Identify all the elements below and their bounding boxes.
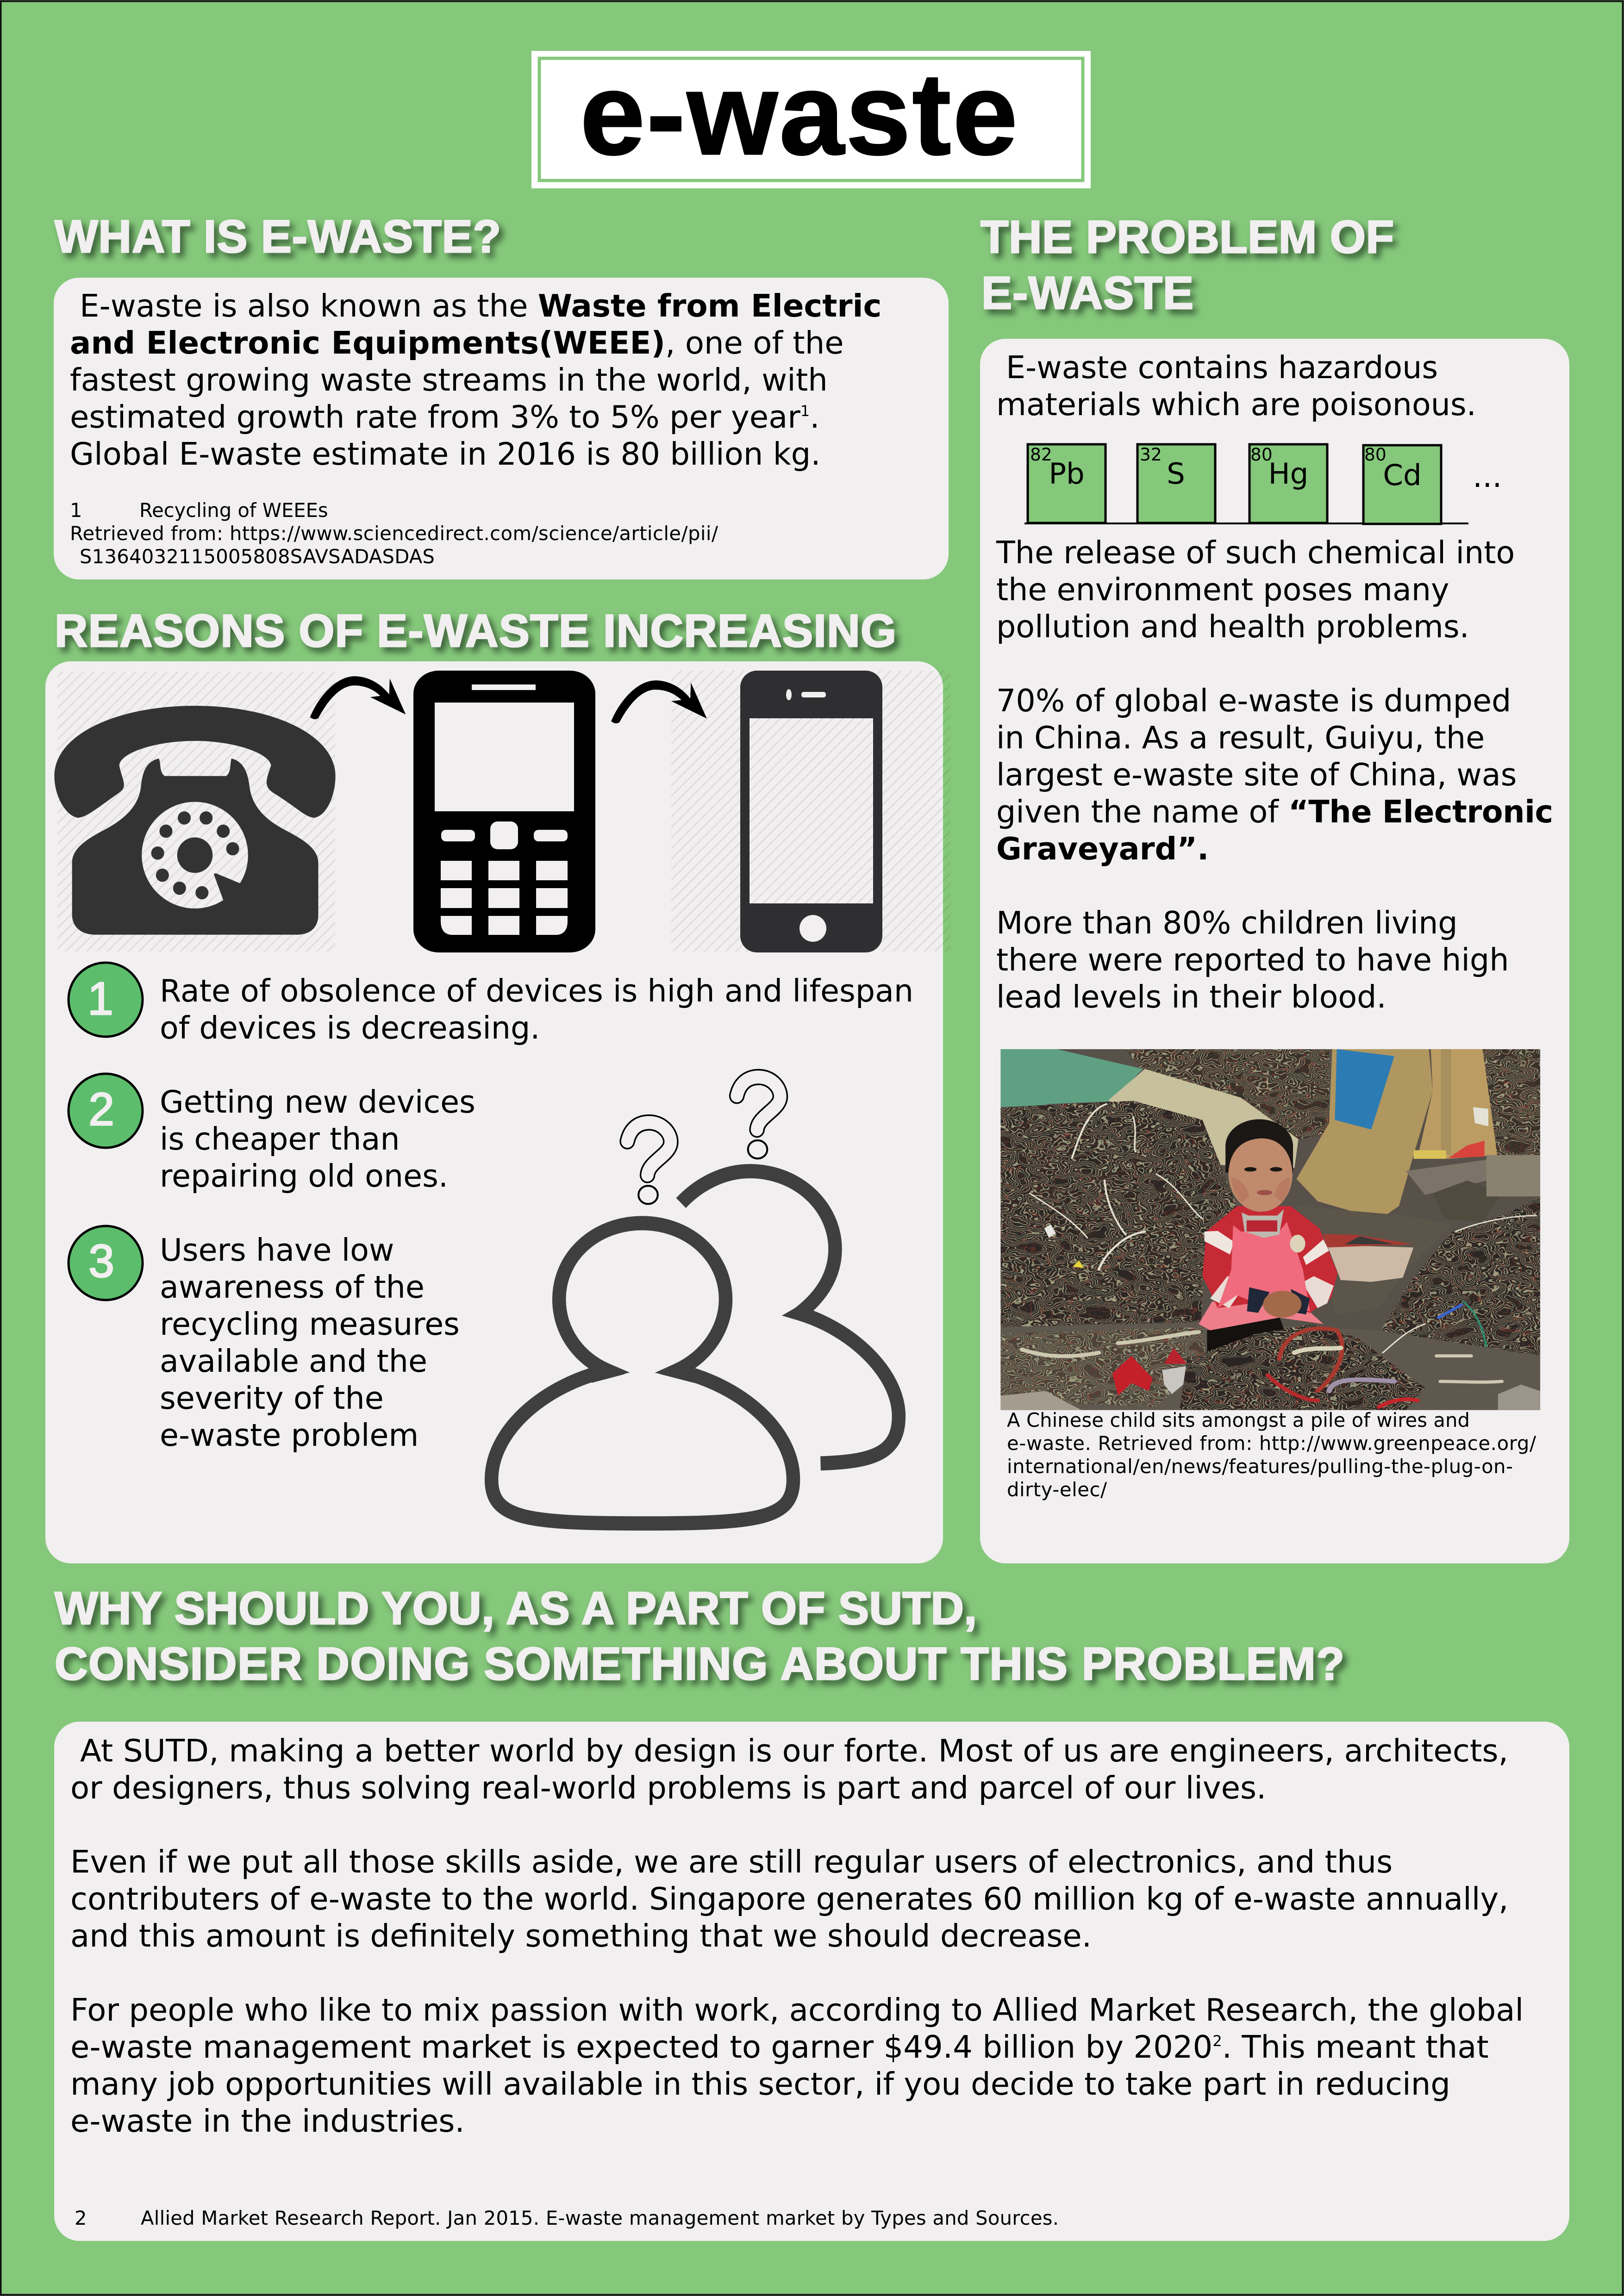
panel: why should you — [54, 1722, 1569, 2241]
pollution text: The release of such chemical into — [996, 535, 1515, 571]
periodic table elements — [1024, 444, 1502, 524]
definition text: Global E-waste estimate in 2016 is 80 billion kg. — [70, 436, 821, 472]
pollution text: 70% of global e-waste is dumped — [996, 683, 1511, 719]
definition text: estimated growth rate from 3% to 5% per year — [70, 399, 800, 435]
arrow: telephone to mobile — [310, 676, 406, 719]
definition text: E-waste is also known as the Waste from Electric — [80, 288, 881, 324]
reason 3 text: available and the — [160, 1343, 427, 1379]
element: Hg: 80 — [1250, 444, 1273, 465]
question mark front — [627, 1122, 671, 1204]
footnote 1: S1364032115005808SAVSADASDAS — [80, 545, 435, 568]
reason 3 text: Users have low — [160, 1232, 394, 1268]
number badge 2 — [69, 1074, 143, 1148]
body text: e-waste management market is expected to garner $49.4 billion by 2020 — [70, 2029, 1212, 2065]
pollution text: More than 80% children living — [996, 905, 1458, 941]
body text: or designers, thus solving real-world problems is part and parcel of our lives. — [70, 1770, 1266, 1806]
heading: why should you: CONSIDER DOING SOMETHING ABOUT THIS PROBLEM? — [55, 1638, 1344, 1689]
definition text: , one of the — [665, 325, 844, 361]
hatch background behind smartphone — [671, 671, 950, 952]
hazardous materials text: E-waste contains hazardous — [1006, 349, 1438, 386]
pollution text: in China. As a result, Guiyu, the — [996, 720, 1485, 756]
body text: e-waste in the industries. — [70, 2103, 465, 2139]
ellipsis: ... — [1473, 458, 1502, 494]
panel: reasons of e-waste increasing — [45, 661, 950, 1563]
question mark back — [737, 1077, 780, 1158]
heading: why should you: WHY SHOULD YOU, AS A PART OF SUTD, — [55, 1582, 977, 1634]
body text: and this amount is definitely something that we should decrease. — [70, 1918, 1092, 1954]
title text: e-waste — [580, 49, 1018, 179]
pollution text: the environment poses many — [996, 572, 1449, 608]
body text: many job opportunities will available in this sector, if you decide to take part in reducing — [70, 2066, 1450, 2102]
reason 2 — [69, 1074, 475, 1194]
reason 2 text: repairing old ones. — [160, 1158, 448, 1194]
photo caption: A Chinese child sits amongst a pile of wires and — [1007, 1409, 1470, 1431]
element: Pb — [1028, 444, 1106, 523]
photo caption: dirty-elec/ — [1007, 1478, 1107, 1501]
number badge 3: 3 — [88, 1235, 114, 1287]
footnote 1: Retrieved from: https://www.sciencedirect.com/science/article/pii/ — [70, 522, 718, 545]
icon: smartphone — [740, 671, 882, 952]
reason 3 text: severity of the — [160, 1380, 384, 1416]
photo caption: e-waste. Retrieved from: http://www.greenpeace.org/ — [1007, 1432, 1537, 1455]
element: S — [1137, 444, 1215, 523]
element: Pb: Pb — [1049, 457, 1085, 491]
definition text: and Electronic Equipments(WEEE) — [70, 325, 665, 361]
heading: the problem of e-waste: E-WASTE — [981, 267, 1193, 318]
panel: the problem of e-waste — [980, 339, 1569, 1563]
body text: At SUTD, making a better world by design is our forte. Most of us are engineers, architects, — [80, 1733, 1508, 1769]
footnote 1: 1 — [70, 499, 82, 522]
footnote 2: 2 — [75, 2207, 87, 2229]
definition text: . — [810, 399, 820, 435]
body text: 2 — [1212, 2032, 1222, 2050]
reason 1 text: Rate of obsolence of devices is high and lifespan — [160, 973, 913, 1009]
pollution text: lead levels in their blood. — [996, 979, 1387, 1015]
hazardous materials text: materials which are poisonous. — [996, 386, 1476, 423]
footnote 2: Allied Market Research Report. Jan 2015. E-waste management market by Types and Sources. — [141, 2207, 1059, 2229]
body text: Even if we put all those skills aside, we are still regular users of electronics, and thus — [70, 1844, 1393, 1880]
body text: . This meant that — [1222, 2029, 1489, 2065]
reason 1 — [69, 963, 913, 1046]
footnote 1: Recycling of WEEEs — [139, 499, 328, 522]
definition text: 1 — [800, 402, 810, 420]
reason 1 text: of devices is decreasing. — [160, 1010, 540, 1046]
pollution text: given the name of “The Electronic — [996, 794, 1553, 830]
pollution text: largest e-waste site of China, was — [996, 757, 1517, 793]
reason 3 text: e-waste problem — [160, 1417, 418, 1453]
photo caption: international/en/news/features/pulling-the-plug-on- — [1007, 1455, 1513, 1478]
number badge 3 — [69, 1226, 143, 1300]
element: Cd: Cd — [1383, 458, 1422, 492]
element: Pb: 82 — [1030, 444, 1052, 465]
reason 2 text: is cheaper than — [160, 1121, 400, 1157]
heading: the problem of e-waste: THE PROBLEM OF — [981, 211, 1394, 262]
icon: confused users — [492, 1077, 899, 1524]
heading: reasons of e-waste increasing: REASONS OF E-WASTE INCREASING — [55, 605, 896, 656]
icon: rotary telephone — [54, 706, 336, 935]
number badge 1 — [69, 963, 143, 1037]
element: Hg: Hg — [1268, 457, 1308, 491]
element: Hg — [1249, 444, 1327, 523]
element: S: S — [1167, 457, 1185, 491]
pollution text: there were reported to have high — [996, 942, 1509, 978]
title box — [531, 49, 1091, 188]
arrow: mobile to smartphone — [611, 680, 707, 723]
element: Cd: 80 — [1364, 444, 1387, 465]
heading: what is e-waste: WHAT IS E-WASTE? — [55, 211, 501, 262]
number badge 2: 2 — [88, 1083, 114, 1135]
reason 2 text: Getting new devices — [160, 1084, 475, 1120]
element: S: 32 — [1140, 444, 1162, 465]
icon: button mobile phone — [413, 671, 595, 952]
reason 3 — [69, 1226, 460, 1453]
number badge 1: 1 — [87, 973, 113, 1025]
pollution text: pollution and health problems. — [996, 609, 1469, 645]
body text: For people who like to mix passion with work, according to Allied Market Research, the global — [70, 1992, 1524, 2028]
panel: what is e-waste — [54, 278, 949, 579]
definition text: fastest growing waste streams in the world, with — [70, 362, 828, 398]
reason 3 text: recycling measures — [160, 1306, 460, 1342]
pollution text: Graveyard”. — [996, 831, 1209, 867]
hatch background behind telephone — [57, 672, 335, 952]
reason 3 text: awareness of the — [160, 1269, 425, 1305]
element: Cd — [1363, 444, 1441, 524]
body text: contributers of e-waste to the world. Singapore generates 60 million kg of e-waste annually, — [70, 1881, 1509, 1917]
photo: child among wires — [1000, 1049, 1540, 1410]
